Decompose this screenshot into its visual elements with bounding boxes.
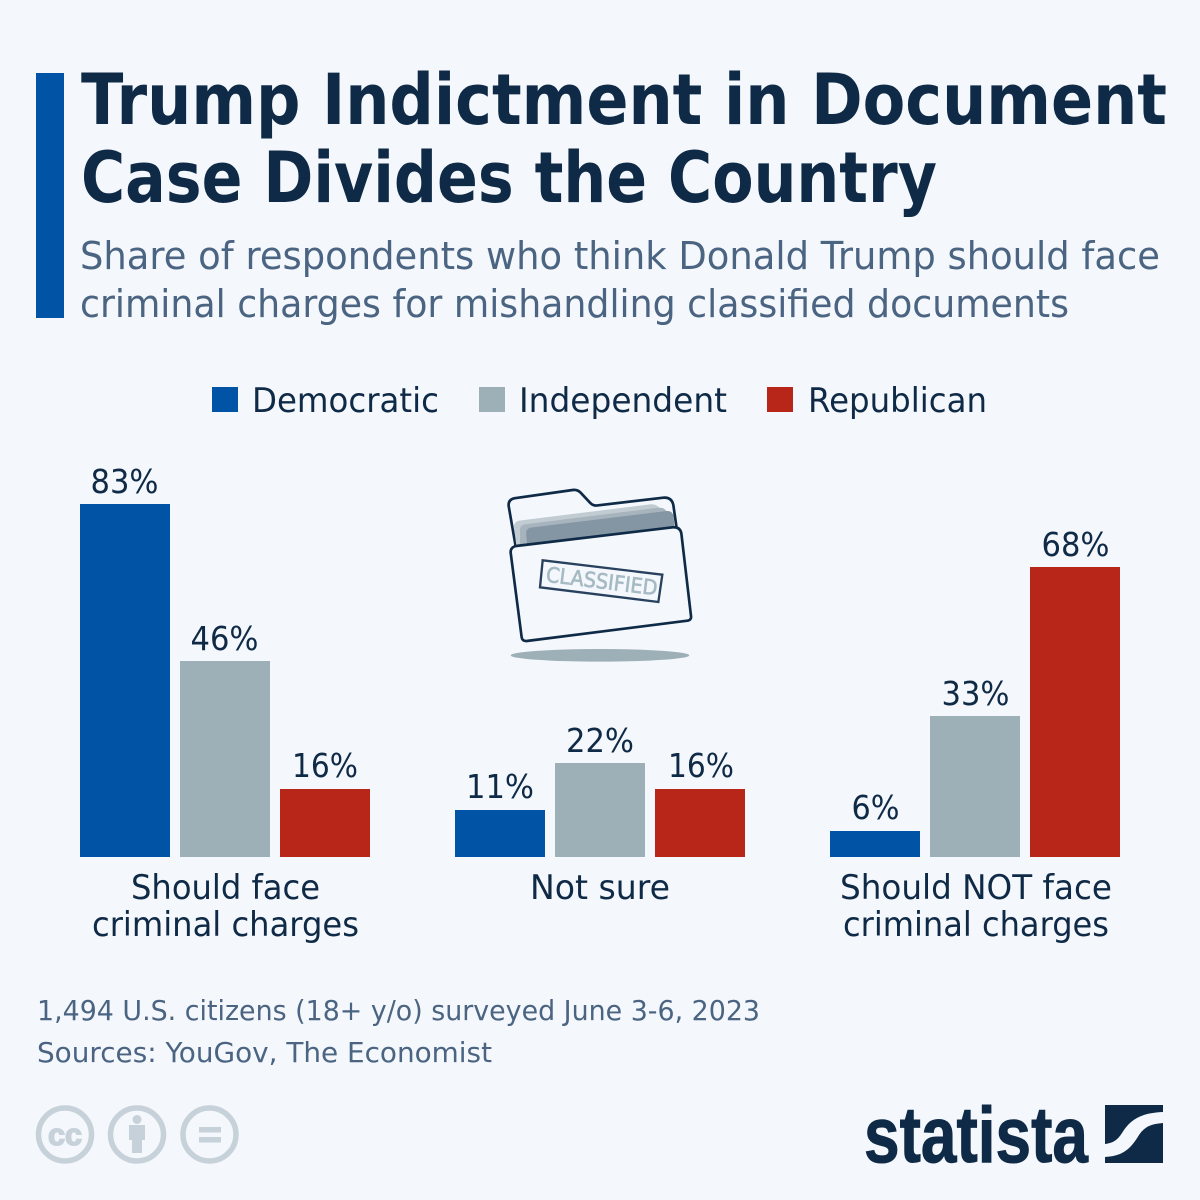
accent bar — [36, 73, 64, 318]
bar: Republican 68% — [1030, 526, 1120, 857]
legend — [212, 381, 987, 421]
category label: Not sure — [530, 868, 670, 907]
logo mark — [1105, 1105, 1163, 1163]
subtitle — [80, 234, 1160, 327]
source note: Sources: YouGov, The Economist — [37, 1036, 492, 1069]
bar: Independent 46% — [180, 620, 270, 857]
bar: Democratic 83%: 83% — [90, 463, 158, 501]
bar: Democratic 6% — [830, 789, 920, 857]
bar: Independent 33%: 33% — [942, 675, 1010, 713]
source note: 1,494 U.S. citizens (18+ y/o) surveyed June 3-6, 2023 — [37, 994, 760, 1027]
bar: Democratic 83% — [80, 463, 170, 857]
category label: Should NOT face — [840, 868, 1112, 907]
title: Case Divides the Country — [81, 137, 937, 219]
bar: Independent 22% — [555, 722, 645, 857]
bar: Independent 22%: 22% — [566, 722, 634, 760]
legend: Republican: Republican — [808, 381, 987, 421]
category label: criminal charges — [92, 905, 359, 944]
bar: Democratic 6%: 6% — [852, 789, 900, 827]
stamp frame — [540, 560, 662, 602]
icon: classified folder — [509, 490, 691, 662]
bar: Republican 16% — [280, 747, 370, 857]
bar group: should face criminal charges — [80, 463, 370, 944]
bar: Democratic 11% — [455, 768, 545, 857]
legend: Independent: Independent — [519, 381, 727, 421]
bar: Democratic 11%: 11% — [466, 768, 534, 806]
icon: attribution — [110, 1108, 164, 1161]
title — [81, 59, 1167, 219]
bar: Republican 68%: 68% — [1042, 526, 1110, 564]
icon: creative commons: cc — [48, 1117, 82, 1152]
logo: statista: statista — [864, 1090, 1089, 1179]
source note — [37, 994, 760, 1069]
bar group: not sure — [455, 722, 745, 907]
bar: Republican 16% — [655, 747, 745, 857]
bar: Independent 46%: 46% — [190, 620, 258, 658]
bar: Independent 33% — [930, 675, 1020, 857]
folder front — [511, 527, 691, 641]
category label: criminal charges — [843, 905, 1109, 944]
subtitle: Share of respondents who think Donald Trump should face — [80, 234, 1160, 279]
folder shadow — [511, 649, 689, 662]
category label: Should face — [131, 868, 320, 907]
legend: Democratic: Democratic — [252, 381, 439, 421]
icon: creative commons — [38, 1108, 92, 1161]
stamp text: CLASSIFIED — [545, 563, 659, 600]
bar group: should not face criminal charges — [830, 526, 1120, 944]
documents — [514, 504, 674, 548]
category label — [92, 868, 359, 944]
category label — [840, 868, 1112, 944]
folder back — [509, 490, 677, 548]
bar: Republican 16%: 16% — [668, 747, 734, 785]
subtitle: criminal charges for mishandling classified documents — [80, 282, 1069, 327]
icon: no derivatives — [183, 1108, 236, 1161]
bar: Republican 16%: 16% — [292, 747, 358, 785]
